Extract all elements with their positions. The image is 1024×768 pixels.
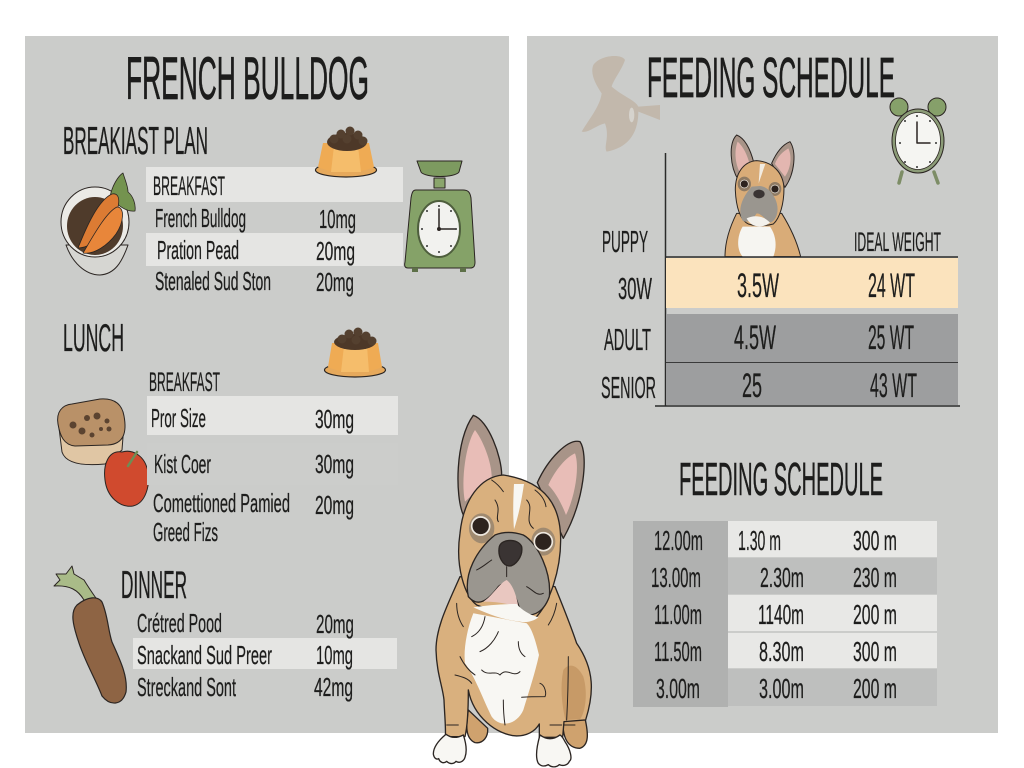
schedule table: 230 m: [853, 562, 897, 593]
table: dinner: 20mg: [316, 609, 354, 639]
table: breakfast: BREAKFAST: [153, 171, 225, 201]
table: lunch: 30mg: [315, 404, 354, 434]
weight table: 3.5W: [737, 267, 779, 305]
dog eye patches: [469, 513, 555, 556]
dog chest: [465, 613, 539, 724]
schedule table: 3.00m: [656, 673, 700, 704]
icon: faded dog silhouette: [582, 56, 660, 152]
schedule table: 200 m: [853, 673, 897, 704]
weight table: 25: [742, 367, 762, 405]
table: lunch: Pror Size: [151, 403, 206, 433]
icon: tomato: [105, 451, 148, 506]
weight table: 30W: [618, 271, 652, 306]
dog mouth: [483, 580, 518, 607]
schedule table: 13.00m: [651, 562, 701, 593]
table: lunch: BREAKFAST: [149, 367, 220, 397]
weight table: 4.5W: [734, 319, 776, 357]
schedule table: 1.30 m: [738, 525, 781, 556]
weight table: 25 WT: [868, 319, 914, 357]
dog front paw left: [433, 734, 466, 764]
dog rear legs: [467, 710, 587, 748]
schedule table: 300 m: [853, 525, 897, 556]
table: lunch: 20mg: [315, 490, 354, 520]
schedule table: 11.00m: [654, 599, 702, 630]
table: lunch: 30mg: [315, 449, 354, 479]
icon: alarm clock: [890, 98, 946, 183]
dog wrinkles: [477, 480, 546, 594]
table: lunch: Greed Fizs: [153, 517, 218, 547]
dog muzzle: [467, 532, 550, 615]
chart axes: [655, 153, 960, 406]
table: lunch: Comettioned Pamied: [153, 488, 290, 518]
illustration: French bulldog: [433, 415, 591, 767]
dog nose: [499, 540, 522, 566]
schedule table: [633, 521, 937, 707]
table: lunch: Kist Coer: [154, 449, 211, 479]
schedule table: 3.00m: [759, 673, 804, 704]
table: breakfast: French Bulldog: [155, 203, 246, 233]
panel: feeding schedule: [527, 36, 998, 733]
table: breakfast: 20mg: [316, 236, 355, 266]
table: dinner: Streckand Sont: [137, 672, 236, 702]
weight table: 43 WT: [870, 367, 917, 405]
dog shading: [562, 666, 586, 720]
schedule table: 11.50m: [654, 636, 702, 667]
dog left ear: [458, 415, 502, 515]
table: dinner: 10mg: [316, 640, 353, 670]
dog eyes: [472, 517, 552, 551]
icon: small dog: [725, 135, 801, 257]
icon: kibble bowl: [316, 126, 376, 177]
panel: meal plan: FRENCH BULLDOG: [126, 45, 369, 112]
weight table: ADULT: [604, 322, 651, 357]
table: dinner: Crétred Pood: [137, 608, 222, 638]
table: breakfast: Stenaled Sud Ston: [155, 266, 271, 296]
panel: meal plan: LUNCH: [63, 317, 124, 360]
panel: meal plan: BREAKIAST PLAN: [63, 120, 208, 163]
icon: kitchen scale: [405, 161, 475, 272]
weight table: [601, 224, 958, 405]
table: breakfast: [146, 167, 403, 297]
schedule table: 2.30m: [760, 562, 804, 593]
table: breakfast: Pration Pead: [157, 235, 239, 265]
icon: carrot bowl: [61, 173, 135, 275]
table: dinner: [133, 608, 397, 702]
dog body: [436, 577, 591, 737]
schedule table: 1140m: [758, 599, 804, 630]
table: breakfast: 10mg: [319, 204, 356, 234]
panel: meal plan: [25, 36, 509, 733]
schedule table: 12.00m: [654, 525, 703, 556]
dog front paw right: [537, 735, 571, 767]
schedule table: 300 m: [853, 636, 897, 667]
icon: lunch box: [58, 399, 125, 465]
table: lunch: [147, 367, 398, 547]
weight table: SENIOR: [601, 370, 656, 405]
weight table: 24 WT: [868, 267, 915, 305]
schedule table: 8.30m: [759, 636, 804, 667]
dog blaze: [513, 484, 524, 529]
weight table: PUPPY: [602, 224, 648, 259]
table: dinner: 42mg: [314, 672, 353, 702]
table: dinner: Snackand Sud Preer: [137, 640, 272, 670]
table: breakfast: 20mg: [316, 267, 354, 297]
dog fur lines: [447, 603, 575, 725]
schedule table: 200 m: [853, 599, 897, 630]
dog head: [459, 475, 561, 618]
icon: brown carrot: [54, 566, 126, 703]
dog right ear: [537, 441, 584, 538]
panel: meal plan: DINNER: [121, 564, 187, 607]
icon: kibble bowl 2: [324, 328, 386, 377]
